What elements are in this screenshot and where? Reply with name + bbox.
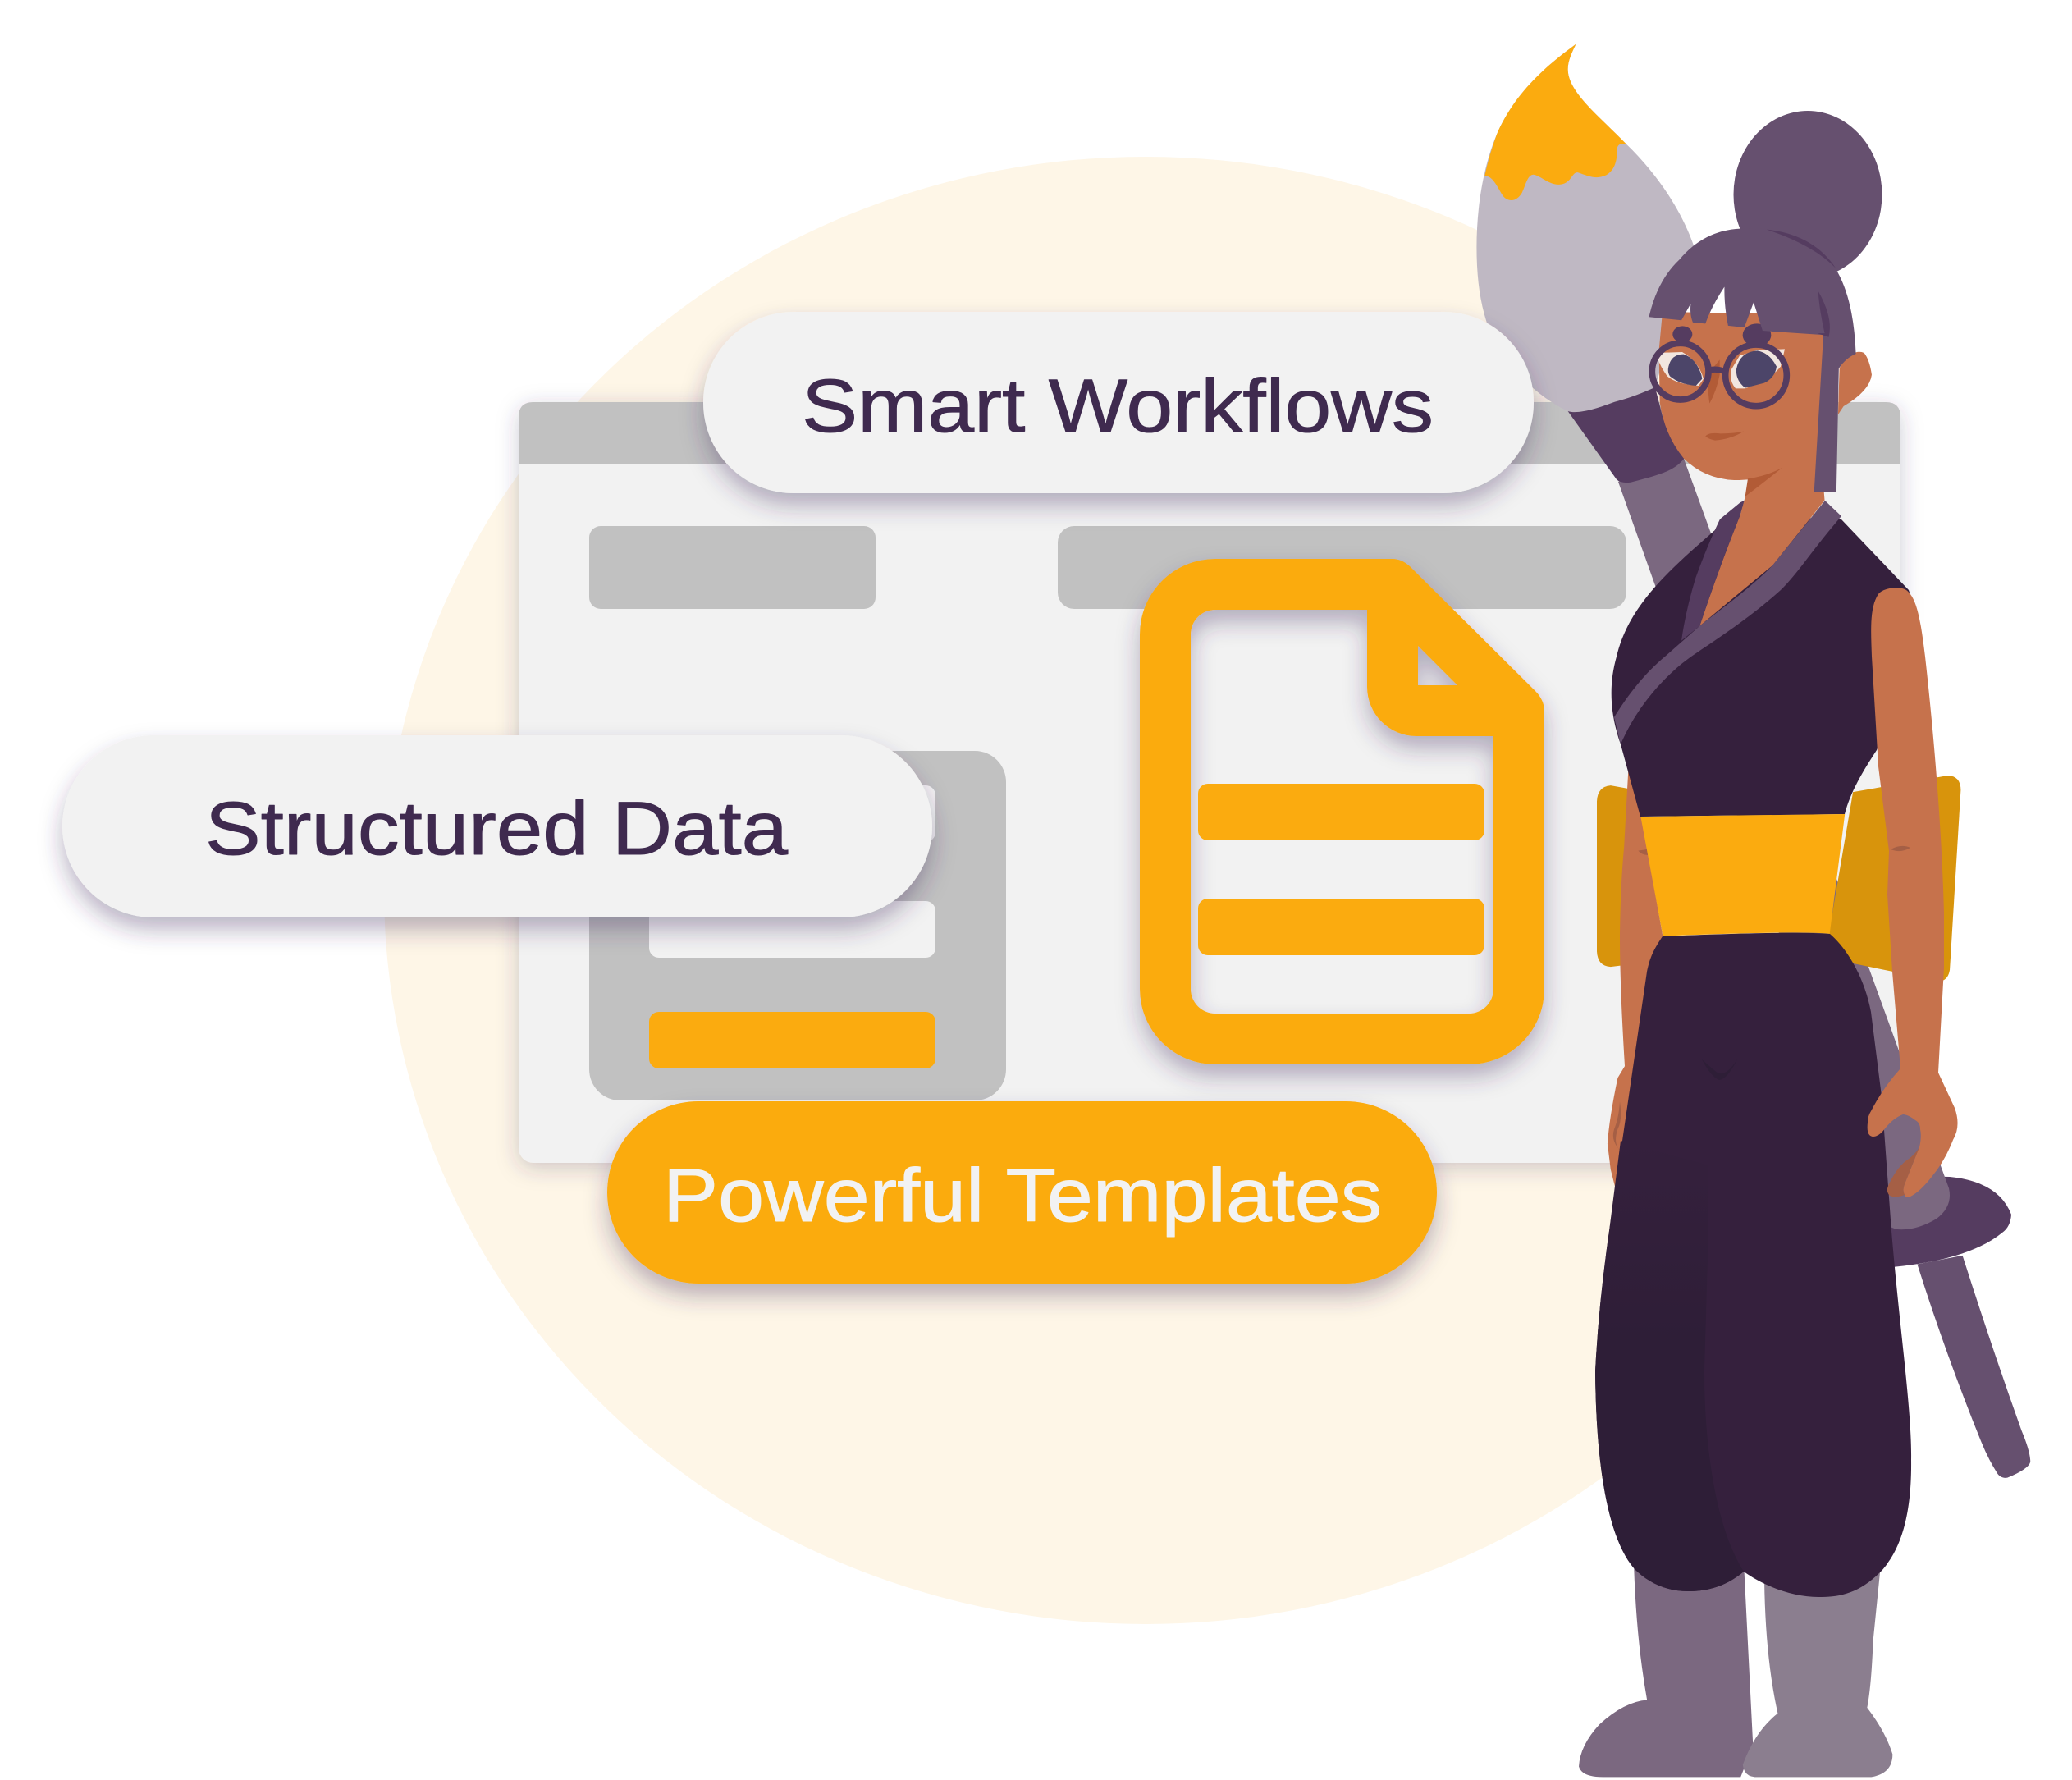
background circle <box>384 157 1907 1624</box>
nose <box>1708 359 1720 404</box>
face shape <box>1659 312 1827 480</box>
wide header placeholder bar <box>1058 526 1626 609</box>
neck shadow <box>1745 468 1782 496</box>
mouth <box>1705 432 1744 441</box>
hair <box>1649 228 1856 492</box>
right arm and hand <box>1868 588 1958 1197</box>
glasses <box>1652 343 1786 406</box>
neck and chest <box>1681 460 1825 641</box>
pill: Powerful Templates: Powerful Templates <box>663 1154 1382 1238</box>
trousers <box>1595 933 1911 1597</box>
sash bow <box>1597 776 1960 981</box>
icon: document <box>1140 559 1544 1064</box>
small header placeholder bar <box>589 526 876 609</box>
character <box>1579 111 1960 1777</box>
pill: Smart Workflows <box>703 312 1534 493</box>
pill: Structured Data: Structured Data <box>205 787 789 871</box>
boots <box>1579 1567 1892 1777</box>
brush bristles <box>1476 44 1695 412</box>
irises <box>1668 355 1702 386</box>
collar band <box>1614 501 1841 744</box>
face <box>1652 312 1872 496</box>
paint on bristles <box>1484 44 1626 200</box>
waist sash <box>1640 814 1845 936</box>
pill: Powerful Templates <box>607 1101 1437 1284</box>
app window <box>519 402 1900 1163</box>
brush ferrule <box>1568 387 1685 483</box>
pill: Smart Workflows: Smart Workflows <box>802 364 1434 448</box>
brush guard <box>1846 1177 2011 1267</box>
back trouser leg <box>1595 1141 1744 1591</box>
grey form card <box>589 751 1006 1100</box>
pill: Structured Data <box>62 735 932 917</box>
brush handle upper section <box>1618 459 1950 1229</box>
torso <box>1612 515 1920 817</box>
brush handle lower section <box>1917 1256 2030 1478</box>
eyebrows <box>1672 326 1692 342</box>
eye whites <box>1658 352 1704 386</box>
left arm <box>1608 770 1663 1187</box>
trouser fold <box>1702 1059 1737 1080</box>
ear <box>1838 352 1872 414</box>
brush head <box>1476 44 1695 483</box>
hair bun <box>1733 111 1882 278</box>
